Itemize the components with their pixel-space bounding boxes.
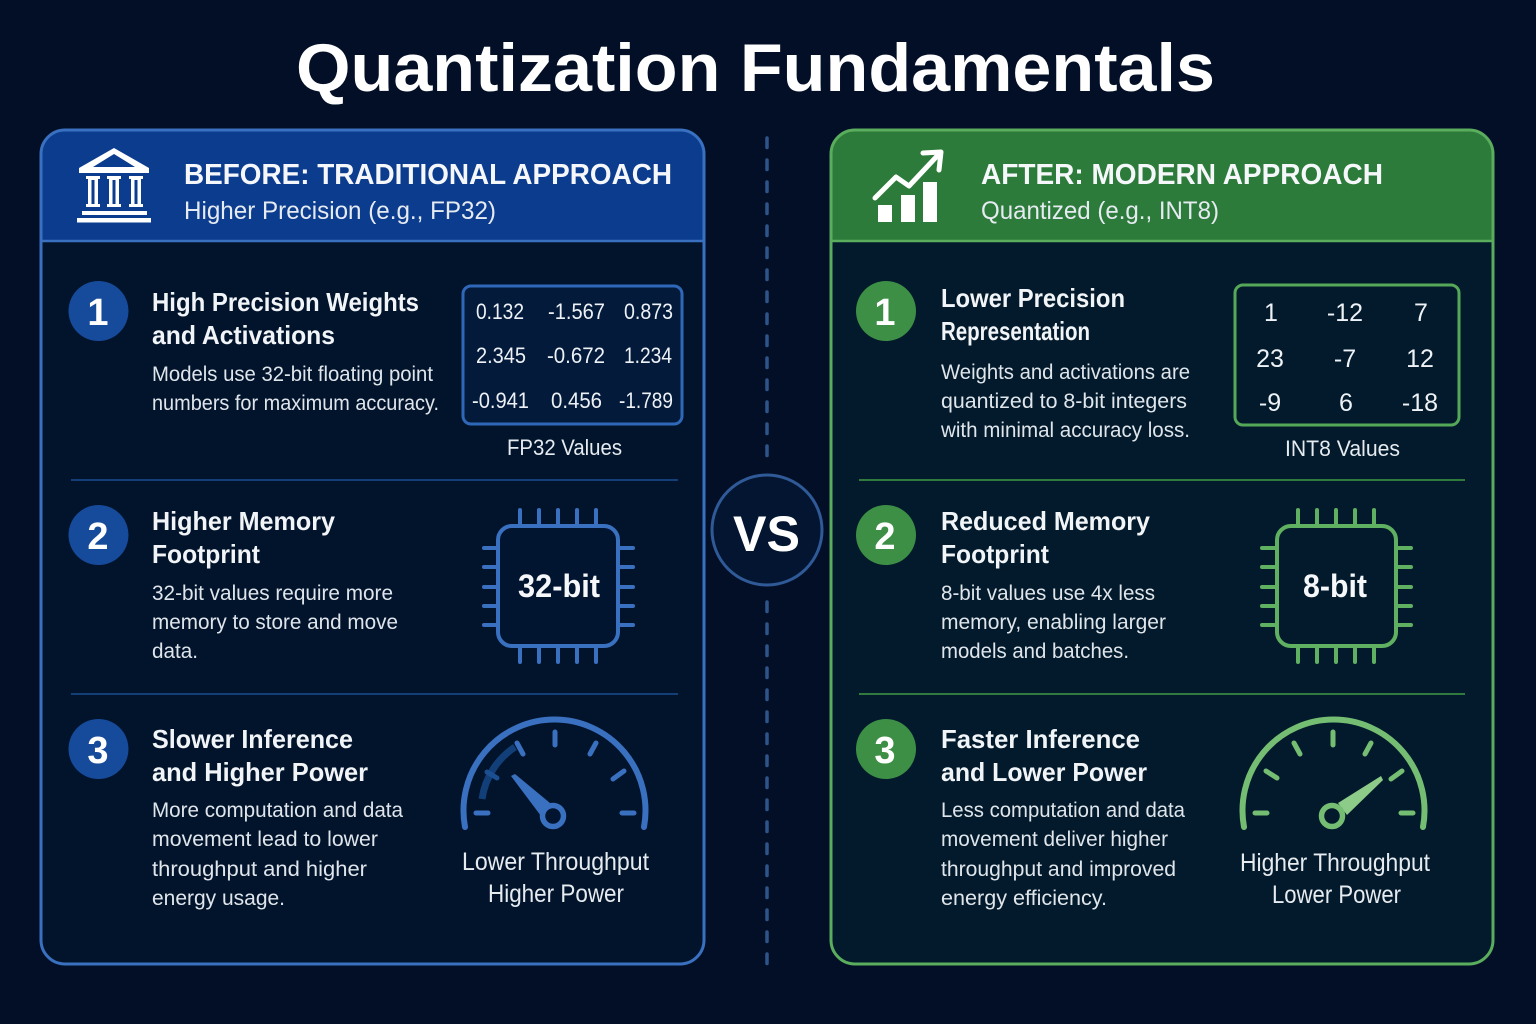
description bbox=[941, 799, 1185, 910]
table: INT8 values: -12 bbox=[1327, 299, 1363, 327]
heading bbox=[152, 287, 419, 350]
number badge: 3 bbox=[87, 730, 109, 772]
table: FP32 values bbox=[463, 286, 682, 424]
description: movement deliver higher bbox=[941, 828, 1168, 851]
icon: growth chart bbox=[875, 152, 941, 222]
item 3: before bbox=[68, 719, 649, 910]
heading: Slower Inference bbox=[152, 724, 353, 754]
heading: and Activations bbox=[152, 320, 335, 350]
description: throughput and higher bbox=[152, 858, 367, 881]
number badge bbox=[856, 281, 916, 341]
table: FP32 values: 2.345 bbox=[476, 343, 526, 368]
header subtitle: before: Higher Precision (e.g., FP32) bbox=[184, 197, 496, 225]
heading: and Lower Power bbox=[941, 757, 1147, 787]
description: More computation and data bbox=[152, 799, 403, 822]
description: throughput and improved bbox=[941, 858, 1176, 881]
description: energy usage. bbox=[152, 887, 285, 910]
table: INT8 values: 7 bbox=[1414, 299, 1428, 327]
table: FP32 values: 0.132 bbox=[476, 299, 524, 324]
description: memory to store and move bbox=[152, 611, 398, 634]
table: FP32 values: -1.567 bbox=[548, 299, 605, 324]
description: with minimal accuracy loss. bbox=[940, 419, 1190, 442]
heading bbox=[152, 506, 336, 569]
item 2: before bbox=[68, 505, 633, 663]
table: INT8 values: -9 bbox=[1259, 389, 1281, 417]
description: 32-bit values require more bbox=[152, 582, 393, 605]
heading bbox=[941, 283, 1125, 346]
description bbox=[152, 363, 439, 415]
heading: Representation bbox=[941, 316, 1090, 346]
table: FP32 values: -1.789 bbox=[619, 388, 673, 413]
table: INT8 values: 1 bbox=[1264, 299, 1278, 327]
description: models and batches. bbox=[941, 640, 1129, 663]
number badge bbox=[856, 505, 916, 565]
gauge label: Lower Power bbox=[1272, 881, 1401, 909]
table: FP32 values: 0.456 bbox=[551, 388, 602, 413]
table: INT8 values: 6 bbox=[1339, 389, 1353, 417]
gauge label bbox=[1240, 849, 1430, 909]
gauge label: Higher Throughput bbox=[1240, 849, 1430, 877]
icon: 8-bit chip: 8-bit bbox=[1303, 568, 1367, 604]
heading: Footprint bbox=[152, 539, 260, 569]
header subtitle: after: Quantized (e.g., INT8) bbox=[981, 197, 1219, 225]
description: memory, enabling larger bbox=[941, 611, 1166, 634]
header: after bbox=[831, 130, 1493, 241]
number badge: 2 bbox=[87, 516, 109, 558]
number badge bbox=[68, 281, 128, 341]
heading: Faster Inference bbox=[941, 724, 1140, 754]
description: 8-bit values use 4x less bbox=[941, 582, 1155, 605]
heading: Reduced Memory bbox=[941, 506, 1151, 536]
icon: 8-bit chip bbox=[1262, 510, 1411, 662]
table: INT8 values bbox=[1235, 285, 1459, 425]
description: Less computation and data bbox=[941, 799, 1185, 822]
description: data. bbox=[152, 640, 198, 663]
heading: and Higher Power bbox=[152, 757, 368, 787]
table: INT8 values: 12 bbox=[1406, 345, 1434, 373]
caption: INT8 Values bbox=[1285, 436, 1400, 461]
VS badge bbox=[712, 475, 822, 585]
number badge: 1 bbox=[87, 292, 109, 334]
heading bbox=[941, 506, 1151, 569]
panel: after bbox=[831, 130, 1493, 964]
icon: gauge fast bbox=[1243, 720, 1424, 827]
number badge bbox=[68, 719, 128, 779]
table: INT8 values: 23 bbox=[1256, 345, 1284, 373]
description: Weights and activations are bbox=[941, 361, 1190, 384]
heading bbox=[941, 724, 1147, 787]
description bbox=[152, 799, 403, 910]
description bbox=[940, 361, 1190, 442]
icon: 32-bit chip: 32-bit bbox=[518, 568, 600, 604]
number badge bbox=[68, 505, 128, 565]
description: Models use 32-bit floating point bbox=[152, 363, 433, 386]
item 2: after bbox=[856, 505, 1411, 663]
description bbox=[941, 582, 1166, 663]
heading: High Precision Weights bbox=[152, 287, 419, 317]
table: FP32 values: -0.941 bbox=[472, 388, 529, 413]
description bbox=[152, 582, 398, 663]
gauge label bbox=[462, 848, 649, 908]
table: INT8 values: -18 bbox=[1402, 389, 1438, 417]
description: numbers for maximum accuracy. bbox=[152, 392, 439, 415]
caption: FP32 Values bbox=[507, 435, 622, 460]
panel: before bbox=[41, 130, 704, 964]
icon: 32-bit chip bbox=[484, 510, 633, 662]
table: FP32 values: 0.873 bbox=[624, 299, 673, 324]
description: energy efficiency. bbox=[941, 887, 1107, 910]
gauge label: Lower Throughput bbox=[462, 848, 649, 876]
item 3: after bbox=[856, 719, 1430, 910]
item 1: before bbox=[68, 281, 682, 460]
center divider bbox=[765, 138, 769, 964]
icon: bank bbox=[77, 148, 151, 222]
item 1: after bbox=[856, 281, 1459, 461]
number badge: 2 bbox=[874, 516, 896, 558]
table: INT8 values: -7 bbox=[1334, 345, 1356, 373]
heading: Higher Memory bbox=[152, 506, 336, 536]
number badge: 1 bbox=[874, 292, 896, 334]
VS badge: VS bbox=[733, 506, 800, 562]
gauge label: Higher Power bbox=[488, 880, 624, 908]
description: movement lead to lower bbox=[152, 828, 378, 851]
title: Quantization Fundamentals bbox=[296, 30, 1215, 106]
heading: Footprint bbox=[941, 539, 1049, 569]
number badge bbox=[856, 719, 916, 779]
heading: Lower Precision bbox=[941, 283, 1125, 313]
header title: before: BEFORE: TRADITIONAL APPROACH bbox=[184, 159, 672, 191]
heading bbox=[152, 724, 368, 787]
number badge: 3 bbox=[874, 730, 896, 772]
header: before bbox=[41, 130, 704, 241]
description: quantized to 8-bit integers bbox=[941, 390, 1187, 413]
header title: after: AFTER: MODERN APPROACH bbox=[981, 159, 1383, 191]
icon: gauge slow bbox=[463, 720, 646, 827]
table: FP32 values: -0.672 bbox=[547, 343, 605, 368]
table: FP32 values: 1.234 bbox=[624, 343, 672, 368]
